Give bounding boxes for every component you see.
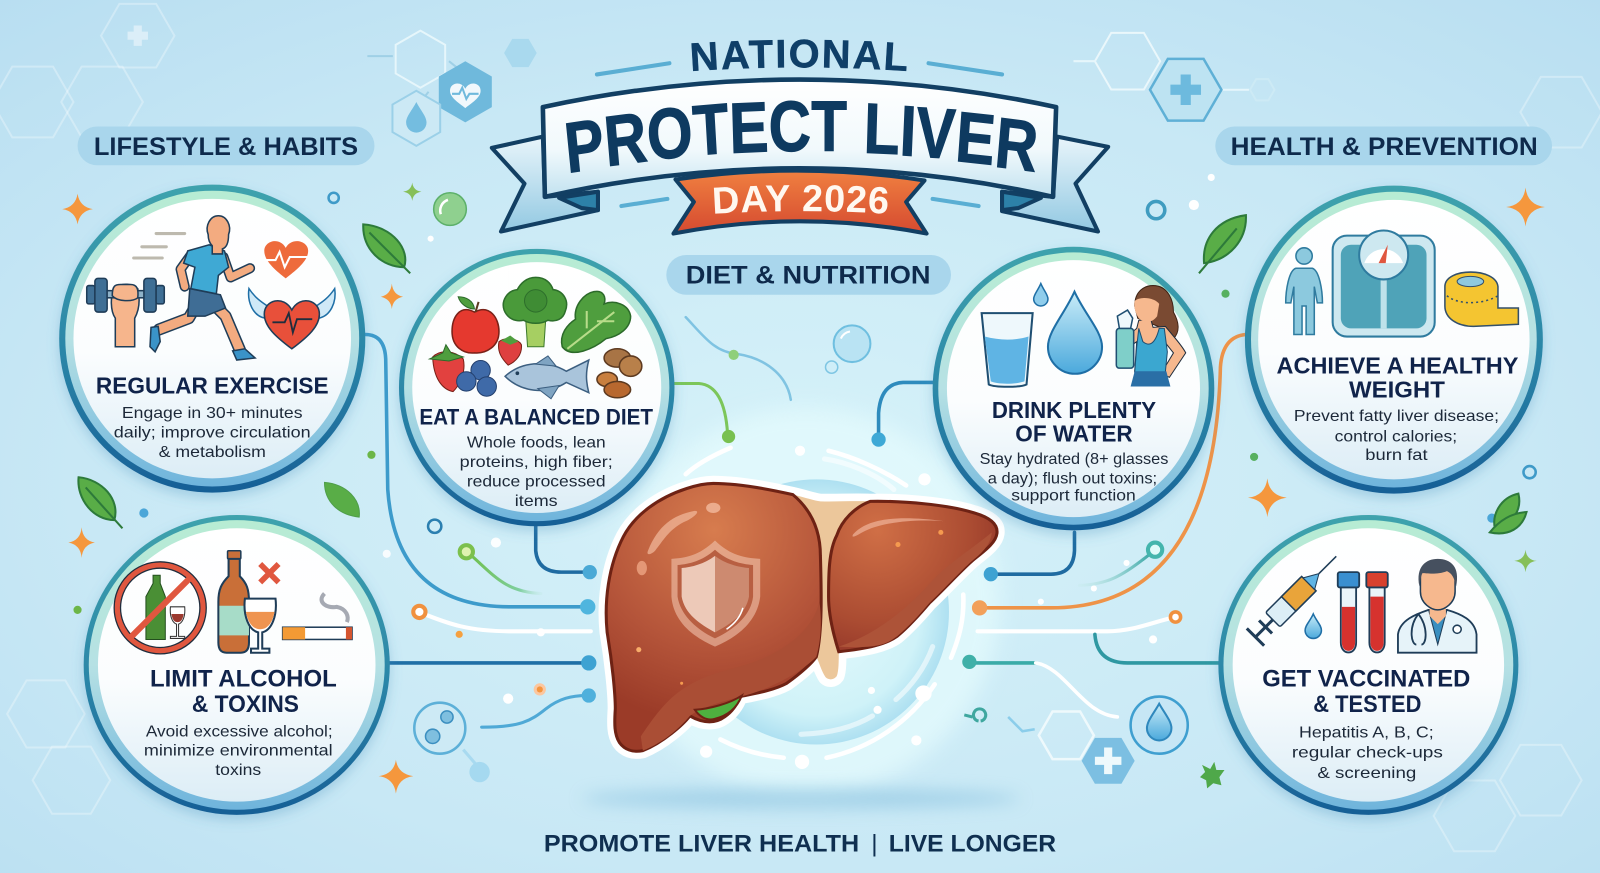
text: water: Stay hydrated (8+ glasses [980, 451, 1168, 468]
text: vaccinated: Hepatitis A, B, C; [1299, 724, 1434, 741]
text: weight: WEIGHT [1349, 377, 1446, 403]
icon: dumbbell and fist [87, 278, 164, 347]
text: water: DRINK PLENTY [992, 397, 1156, 423]
circle frame [399, 249, 674, 526]
text: diet: EAT A BALANCED DIET [419, 404, 654, 429]
circle frame [1245, 186, 1543, 494]
icon: fish [505, 356, 589, 399]
connector: green strand left [460, 545, 541, 594]
decorative title dashes [597, 63, 1002, 206]
highlights [647, 511, 697, 554]
left lobe [606, 483, 821, 751]
orange day ribbon [673, 171, 927, 234]
icon: syringe [1247, 548, 1345, 646]
heading pill: health & prevention [1215, 126, 1552, 165]
sparkles green [403, 183, 1537, 572]
icon: leafy greens [562, 291, 631, 352]
text: regular exercise: & metabolism [159, 444, 266, 461]
icon: tape measure [1445, 272, 1518, 326]
title: protect liver: PROTECT LIVER [561, 86, 1041, 188]
text: diet [419, 404, 654, 510]
text: diet: proteins, high fiber; [460, 454, 613, 471]
icon: strawberry large [430, 345, 464, 392]
leaf left lower [78, 477, 122, 528]
leaf small [324, 482, 359, 517]
text: regular exercise [96, 373, 329, 461]
leaf [363, 224, 410, 273]
text: regular exercise: daily; improve circulation [114, 425, 311, 442]
text: limit: minimize environmental [144, 743, 333, 760]
icon: cigarette and smoke [283, 594, 352, 639]
connector: teal stub and white curve [962, 655, 1117, 717]
icon: broccoli [503, 277, 567, 347]
title [490, 39, 1110, 236]
text: diet: Whole foods, lean [467, 435, 606, 452]
connector: teal ring strand [1080, 543, 1162, 585]
text: vaccinated [1262, 665, 1470, 782]
leaf right [1199, 215, 1246, 273]
shadow under liver [582, 788, 1020, 809]
text: weight [1277, 352, 1519, 464]
icon: nuts [597, 349, 642, 398]
icon: large drop [1048, 292, 1102, 374]
icon: person [1286, 248, 1322, 335]
leaf scrap [1200, 762, 1224, 788]
shield [671, 541, 760, 647]
sparkles orange [62, 188, 1545, 793]
icon: wine glass [245, 599, 276, 653]
text: limit [144, 665, 337, 779]
panel: limit alcohol and toxins [84, 515, 390, 815]
left lobe lower fold [641, 602, 821, 751]
connector: vaccinated [1095, 634, 1218, 663]
ribbon main [543, 80, 1056, 197]
right lobe [829, 501, 997, 652]
icon: runner [134, 216, 255, 360]
icon: orange heart [264, 241, 308, 278]
connector: healthy weight [972, 335, 1246, 615]
connector: exercise [365, 335, 595, 614]
liver silhouette and ligament [606, 483, 997, 751]
liver [606, 483, 997, 751]
icon: winged heart [249, 289, 335, 349]
text: weight: Prevent fatty liver disease; [1294, 408, 1499, 425]
panel: eat a balanced diet [399, 249, 674, 526]
text: water: a day); flush out toxins; [988, 470, 1157, 487]
icon: woman with bottle [1116, 286, 1186, 387]
text: limit: & TOXINS [192, 691, 299, 718]
title: national: NATIONAL [691, 39, 907, 72]
connector: diet right [673, 383, 735, 443]
icon: drop [1305, 614, 1321, 638]
panel: get vaccinated and tested [1218, 515, 1518, 815]
ribbon tails [492, 137, 1108, 232]
heading pill: diet & nutrition: DIET & NUTRITION [686, 262, 931, 290]
icon: small drop [1034, 284, 1048, 306]
connector: white strand left [413, 606, 591, 631]
connector: upper green dots [686, 317, 791, 400]
text: regular exercise: REGULAR EXERCISE [96, 373, 329, 399]
panel: achieve a healthy weight [1245, 186, 1543, 494]
icon cluster: hexagons top right [1073, 33, 1274, 121]
text: limit: toxins [215, 762, 261, 779]
icon: apple [452, 297, 499, 353]
hexagons bottom right [964, 709, 1135, 784]
text: limit: LIMIT ALCOHOL [150, 665, 337, 692]
icon: blueberries [457, 361, 496, 396]
green bubble [434, 193, 466, 225]
text: regular exercise: Engage in 30+ minutes [122, 405, 303, 422]
footer tagline: LIVE LONGER [889, 831, 1056, 858]
leaves and sparkles [62, 183, 1545, 793]
text: weight: burn fat [1365, 447, 1428, 464]
icon: no alcohol sign [117, 565, 203, 651]
glow sphere behind liver [612, 408, 1000, 795]
text: water [980, 397, 1168, 505]
connector: white strand right [978, 612, 1181, 631]
icon cluster: hexagons top left [367, 31, 537, 146]
text: water: OF WATER [1015, 421, 1133, 447]
connector: alcohol [390, 655, 596, 671]
icon: red cross [260, 564, 279, 582]
leaf pair right [1490, 494, 1527, 533]
text: diet: items [515, 493, 558, 510]
bubble with water drop [1131, 697, 1188, 754]
soap bubbles upper centre [826, 325, 870, 373]
connector: diet bottom [536, 526, 597, 579]
title: day 2026: DAY 2026 [714, 184, 888, 214]
text: weight: ACHIEVE A HEALTHY [1277, 352, 1519, 378]
circle frame [933, 247, 1214, 530]
heading pill: health & prevention: HEALTH & PREVENTION [1231, 133, 1538, 161]
circle frame [84, 515, 390, 815]
text: vaccinated: regular check-ups [1292, 745, 1443, 762]
circle frame [59, 185, 365, 493]
connector: water bottom [984, 532, 1074, 581]
footer tagline: PROMOTE LIVER HEALTH [544, 831, 859, 858]
text: diet: reduce processed [467, 473, 606, 490]
text: water: support function [1011, 488, 1136, 505]
connector: bubble strand left [482, 688, 596, 727]
panel: regular exercise [59, 185, 365, 493]
text: vaccinated: & screening [1317, 765, 1416, 782]
connector lines [365, 317, 1246, 727]
icon: test tubes [1338, 572, 1388, 652]
circle frame [1218, 515, 1518, 815]
footer tagline: | [871, 831, 878, 858]
icon: doctor [1398, 559, 1477, 653]
icon: glass of water [982, 313, 1033, 387]
footer tagline [544, 831, 1056, 858]
icon: bathroom scale [1333, 230, 1435, 337]
gallbladder [695, 696, 742, 719]
heading pill: lifestyle & habits: LIFESTYLE & HABITS [94, 133, 358, 161]
bubble with cells [414, 703, 490, 782]
icon: strawberry small [499, 336, 522, 365]
text: vaccinated: GET VACCINATED [1262, 665, 1470, 692]
text: limit: Avoid excessive alcohol; [146, 723, 333, 740]
panel: drink plenty of water [933, 247, 1214, 530]
text: weight: control calories; [1335, 429, 1457, 446]
decorative particles [73, 174, 1536, 704]
heading pill: lifestyle & habits [78, 126, 374, 165]
text: vaccinated: & TESTED [1313, 691, 1421, 718]
right lobe fold [839, 532, 992, 647]
connector: water left [871, 382, 935, 447]
icon: beer bottle [218, 551, 249, 653]
heading pill: diet & nutrition [666, 255, 951, 295]
